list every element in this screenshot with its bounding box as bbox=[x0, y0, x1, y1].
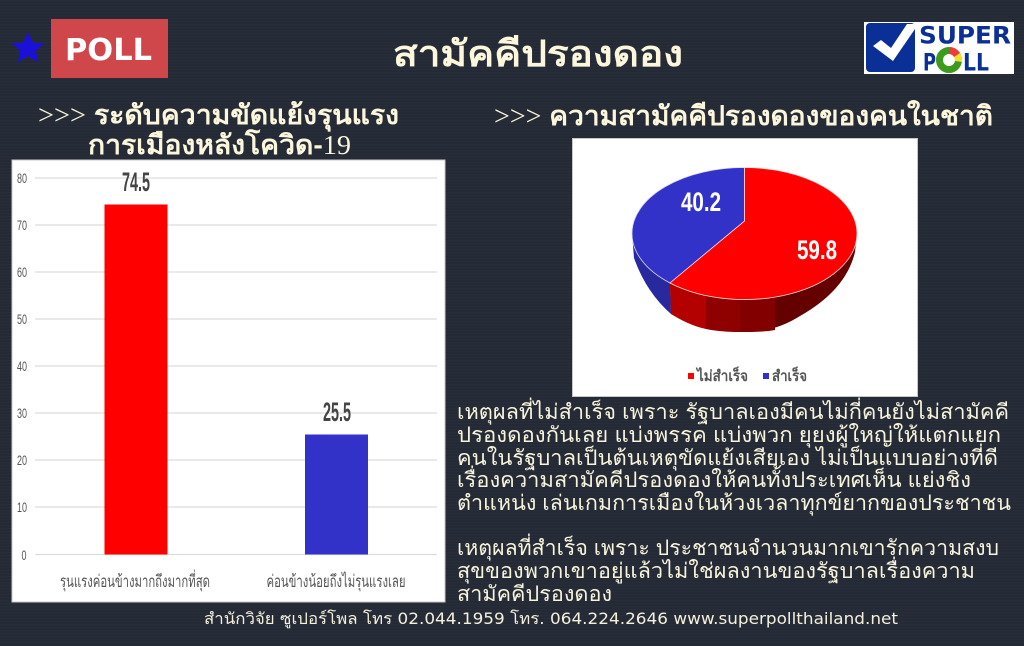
text block: reasons for failure: เรื่องความสามัคคีปรองดองให้คนทั้งประเทศเห็น แย่งชิง bbox=[457, 465, 971, 492]
badge: POLL: POLL bbox=[65, 33, 152, 68]
y-axis ticks: 0 bbox=[22, 547, 27, 563]
heading: violence level: การเมืองหลังโควิด- 19 bbox=[88, 128, 351, 160]
badge: POLL bbox=[51, 19, 168, 78]
pie slice: red 59.8 bbox=[670, 168, 857, 300]
x-axis label: not severe: ค่อนข้างน้อยถึงไม่รุนแรงเลย bbox=[266, 571, 406, 592]
pie slice: red 59.8: 59.8 bbox=[797, 235, 837, 265]
logo: Super Poll: LL bbox=[963, 48, 989, 76]
logo: Super Poll bbox=[864, 22, 1014, 76]
heading: national reconciliation: >>> ความสามัคคีปรองดองของคนในชาติ bbox=[494, 100, 993, 131]
x-axis label: severe: รุนแรงค่อนข้างมากถึงมากที่สุด bbox=[60, 569, 210, 592]
y-axis ticks: 50 bbox=[17, 311, 27, 327]
text block: reasons for success: สุขของพวกเขาอยู่แล้วไม่ใช่ผลงานของรัฐบาลเรื่องความ bbox=[457, 556, 975, 584]
legend: สำเร็จ bbox=[772, 366, 807, 385]
title: สามัคคีปรองดอง bbox=[393, 33, 683, 74]
text block: reasons for failure bbox=[457, 397, 1011, 516]
text block: reasons for failure: ตำแหน่ง เล่นเกมการเมืองในห้วงเวลาทุกข์ยากของประชาชน bbox=[457, 491, 1011, 516]
legend bbox=[688, 366, 807, 385]
y-axis ticks: 40 bbox=[17, 358, 27, 374]
bar: 25.5 bbox=[305, 397, 368, 554]
bar: 25.5: 25.5 bbox=[323, 397, 351, 427]
icon: blue star bbox=[12, 32, 44, 62]
bar: 74.5: 74.5 bbox=[122, 167, 150, 197]
y-axis ticks: 20 bbox=[17, 452, 27, 468]
text block: reasons for failure: ปรองดองกันเลย แบ่งพรรค แบ่งพวก ยุยงผู้ใหญ่ให้แตกแยก bbox=[457, 423, 1001, 448]
text block: reasons for success: เหตุผลที่สำเร็จ เพราะ ประชาชนจำนวนมากเขารักความสงบ bbox=[457, 533, 999, 561]
y-axis ticks bbox=[17, 170, 27, 563]
pie side: red bbox=[670, 233, 857, 332]
logo: Super Poll: SUPER bbox=[919, 22, 1011, 50]
text block: reasons for success bbox=[457, 533, 999, 606]
bar: 74.5 bbox=[104, 167, 168, 554]
y-axis ticks: 80 bbox=[17, 170, 27, 186]
text block: reasons for success: สามัคคีปรองดอง bbox=[457, 583, 612, 606]
footer: contact: สำนักวิจัย ซูเปอร์โพล โทร 02.044.1959 โทร. 064.224.2646 www.superpollthailand.net bbox=[204, 609, 898, 629]
heading: violence level: >>> ระดับความขัดแย้งรุนแรง bbox=[38, 100, 399, 132]
logo: Super Poll: P bbox=[923, 48, 936, 76]
text block: reasons for failure: เหตุผลที่ไม่สำเร็จ เพราะ รัฐบาลเองมีคนไม่กี่คนยังไม่สามัคคี bbox=[457, 397, 1009, 425]
panel: pie chart bbox=[572, 138, 918, 396]
legend: ไม่สำเร็จ bbox=[695, 366, 748, 385]
text block: reasons for failure: คนในรัฐบาลเป็นต้นเหตุขัดแย้งเสียเอง ไม่เป็นแบบอย่างที่ดี bbox=[457, 443, 998, 471]
heading: violence level bbox=[38, 100, 399, 160]
y-axis ticks: 60 bbox=[17, 264, 27, 280]
pie slice: blue 40.2 bbox=[632, 168, 744, 283]
y-axis ticks: 10 bbox=[17, 499, 27, 515]
panel: bar chart bbox=[12, 160, 445, 602]
y-axis ticks: 70 bbox=[17, 217, 27, 233]
y-axis ticks: 30 bbox=[17, 405, 27, 421]
pie slice: blue 40.2: 40.2 bbox=[681, 187, 721, 217]
pie side: blue bbox=[632, 233, 671, 314]
